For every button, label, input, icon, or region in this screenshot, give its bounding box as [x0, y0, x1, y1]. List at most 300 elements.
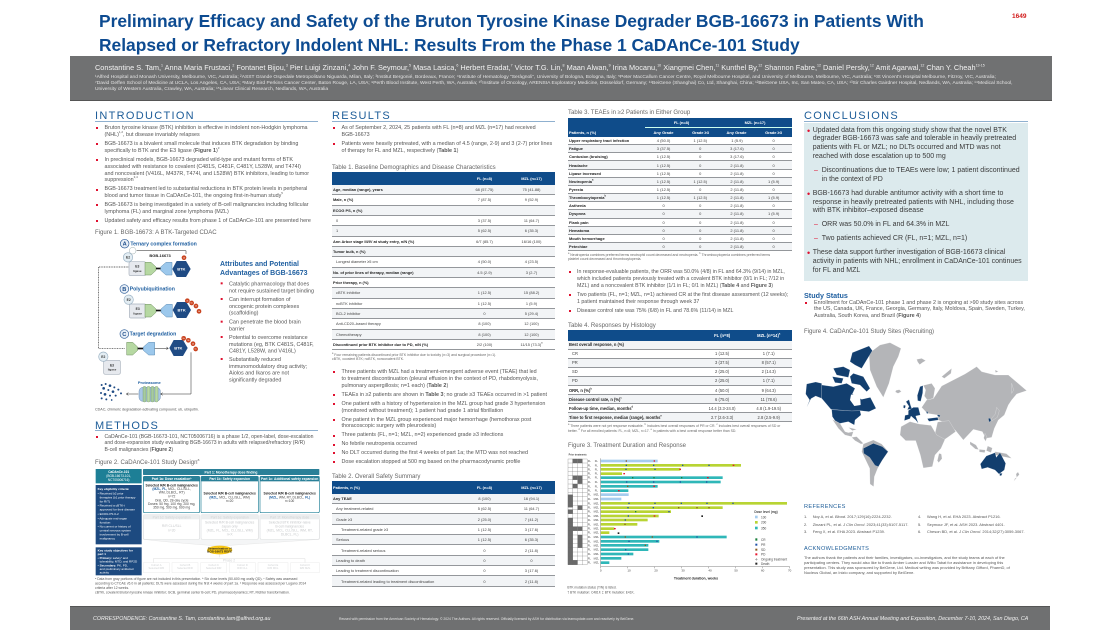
table 3: 0 [773, 154, 775, 159]
table 3: 1 (12.5) [693, 195, 707, 200]
histology and mutation labels: FL [588, 518, 591, 522]
table 1: 4 (23.5) [525, 259, 538, 264]
table 3: 0 [662, 211, 665, 216]
table 4: Time to first response, median (range), monthse [569, 414, 662, 420]
table 4: 9 (64.3) [762, 388, 776, 393]
table 1: 7 (87.5) [478, 197, 491, 202]
table 3: Fatigue [569, 146, 583, 151]
non-participating countries [832, 343, 1027, 487]
heading: conclusions: CONCLUSIONS [804, 110, 899, 122]
faded dose panels: Selected R/R B-cell malignancies [205, 520, 255, 524]
table 3: 2 (11.8) [730, 163, 744, 168]
table 2: 6 (35.3) [525, 537, 538, 542]
panel B [120, 285, 201, 318]
table 1: 15 (88.2) [524, 290, 539, 295]
table 2: Any treatment-related [336, 506, 373, 511]
phase 2 faded cohorts: R/R MCL [268, 566, 279, 570]
authors and affiliations band: ¹Alfred Hospital and Monash University, Melbourne, VIC, Australia; ²ASST Grande Ospedale Metropolitano Niguarda, Milan, Italy; ³Institut Bergonié, Bordeaux, France; ⁴Institute of Hematology “Seràgnoli”, University of Bologna, Bologna, Italy; ⁵Peter MacCallum Cancer Centre, Royal Melbourne Hospital, and University of Melbourne, Melbourne, VIC, Australia; ⁶St Vincent’s Hospital Melbourne, Fitzroy, VIC, Australia; [95, 75, 996, 80]
part 1a panel: Doses: 50 mg, 100 mg, 200 mg, [148, 502, 195, 506]
table 1: Tumor bulk, n (%) [333, 249, 366, 254]
attributes and advantages list: Aiolos and Ikaros are not [229, 371, 289, 377]
table 3: Neutropeniaa [569, 179, 593, 184]
table 3: Mouth hemorrhage [569, 236, 605, 241]
table 3: 1 (5.9) [768, 195, 779, 200]
figure 3 footnote [567, 586, 635, 594]
panel B: B [122, 287, 126, 293]
table 4 footnote [568, 423, 780, 433]
authors and affiliations band: Constantine S. Tam,1 Anna Maria Frustaci,2 Fontanet Bijou,3 Pier Luigi Zinzani,4 John F. Seymour,5 Masa Lasica,6 Herbert Eradat,7 Victor T.G. Lin,8 Maan Alwan,9 Irina Mocanu,10 Xiangmei Chen,11 Kunthel By,12 Shannon Fabre,12 Daniel Persky,12 Amit Agarwal,12 Chan Y. Cheah13-15 [95, 62, 985, 72]
table 4: 14.4 (3.3-24.0) [709, 406, 736, 411]
histology and mutation labels [588, 459, 600, 565]
table 4 footnote: better. d For all enrolled patients: FL, n=8; MZL, n=17. e In patients with a best overall response better than SD. [568, 428, 736, 433]
histology and mutation labels: FL [588, 501, 591, 505]
faded dose panels: Selected BTK inhibitor-naive [269, 520, 311, 524]
histology and mutation labels: FL [588, 463, 591, 467]
table 1: No. of prior lines of therapy, median (range) [333, 270, 414, 275]
table 3: FL (n=8) [674, 120, 689, 125]
table 1: ncBTK inhibitor [336, 301, 362, 306]
table 1: 4.5 (2-9) [477, 270, 492, 275]
table 4: 2.7 (2.6-3.3) [711, 415, 733, 420]
phase 2 faded cohorts: Phase 2 [223, 559, 235, 563]
heading: references: REFERENCES [804, 504, 846, 510]
histology and mutation labels: FL [588, 459, 591, 463]
histology and mutation labels: FL [595, 484, 598, 488]
study status bullet [805, 300, 1025, 319]
figure 1 caption: CDAC, chimeric degradation-activating compound; ub, ubiquitin. [95, 407, 199, 411]
title: Relapsed or Refractory Indolent NHL: Results From the Phase 1 CaDAnCe-101 Study [99, 34, 800, 54]
figure 4: world map of study sites [806, 342, 1026, 486]
table 4: 2.8 (2.5-9.9) [758, 415, 780, 420]
table 1: Age, median (range), years [333, 187, 383, 192]
table 1: 0 [483, 311, 486, 316]
table 1: 11 (64.7) [524, 218, 539, 223]
references list: Wang H, et al. EHA 2023. Abstract P1216. [927, 514, 1001, 519]
legend: SD [761, 548, 766, 552]
table 3: 0 [699, 187, 701, 192]
table 1: Chemotherapy [336, 332, 362, 337]
objectives box: part 1 [98, 552, 106, 556]
determination ellipse [207, 546, 232, 554]
figure 4 title: Figure 4. CaDAnCe-101 Study Sites (Recruiting) [804, 329, 934, 335]
objectives box: and [122, 556, 128, 560]
table 3: 1 (12.5) [657, 187, 670, 192]
table 3: 2 (11.8) [730, 244, 744, 249]
table 2: 2 (25.0) [478, 517, 491, 522]
histology and mutation labels: FL [595, 467, 598, 471]
table 2: 3 (17.6) [525, 568, 538, 573]
faded dose panels: Part 1f: Monotherapy dose [270, 515, 309, 519]
figure 2 footnotes: cBTKi, covalent Bruton tyrosine kinase inhibitor; GCB, germinal center B-cell; PD, pharmacodynamics; RT, Richter transformation. [95, 590, 290, 594]
introduction bullets: BGB-16673 is a bivalent small molecule that induces BTK degradation by binding [104, 141, 298, 147]
table 1: cBTK inhibitor [336, 290, 360, 295]
table 2: 11 (64.7) [524, 506, 539, 511]
histology and mutation labels: MZL [594, 548, 600, 552]
attributes and advantages list: Potential to overcome resistance [229, 335, 308, 341]
x axis [600, 458, 792, 581]
legend: Dose level (mg) [754, 510, 778, 514]
table 2: 1 (12.5) [478, 537, 491, 542]
legend [754, 510, 787, 566]
table 3: Grade ≥3 [765, 130, 782, 135]
table 3: 3 (37.5) [657, 146, 670, 151]
histology and mutation labels: FL [588, 497, 591, 501]
histology and mutation labels: MZL [594, 556, 600, 560]
figure 1: BTK-targeted CDAC diagram [95, 239, 314, 412]
faded dose panels: Part 1d: Safety expansion [153, 515, 191, 519]
table 1: 1 [336, 228, 338, 233]
attributes and advantages list: oncogenic protein complexes [229, 304, 300, 310]
table 3: 0 [773, 146, 775, 151]
table 4: 11 (78.6) [761, 397, 777, 402]
methods bullet: CaDAnCe-101 (BGB-16673-101, NCT05006716) is a phase 1/2, open-label, dose-escalation [104, 434, 313, 440]
panel: conclusions: Updated data from this ongoing study show that the novel BTK [813, 127, 1007, 134]
table 2: 8 (100) [478, 496, 491, 501]
table 1: 16/16 (100) [522, 239, 541, 244]
histology and mutation labels: MZL [594, 543, 600, 547]
table 3 footnote: platelet count decreased and thrombocytopenia. [568, 257, 641, 261]
histology and mutation labels: FL [588, 539, 591, 543]
table 3: 0 [699, 146, 701, 151]
references list: Noy A, et al. Blood. 2017;129(16):2224-2232. [813, 514, 892, 519]
phase 2 faded cohorts: Cohort B [180, 563, 190, 567]
table 3: Any Grade [654, 130, 673, 135]
table 1: 6/7 (85.7) [476, 239, 493, 244]
table 3 title: Table 3. TEAEs in ≥2 Patients in Either Group [568, 110, 690, 116]
phase 2 faded cohorts: Cohort C [208, 563, 219, 567]
panel: conclusions: – [814, 235, 818, 242]
references list: Cheson BD, et al. J Clin Oncol. 2014;32(27):3059-3067. [927, 529, 1025, 534]
participating countries [806, 346, 1006, 476]
attributes and advantages list: not require sustained target binding [229, 288, 314, 294]
histology and mutation labels: FL [588, 514, 591, 518]
attributes and advantages list: significantly degraded [229, 377, 281, 383]
histology and mutation labels: MZL [594, 522, 600, 526]
table 2: 16 (94.1) [524, 496, 539, 501]
figure 3 footnote: BTK mutation status (T/N) is listed. [567, 586, 617, 590]
table 4: MZL (n=14)a [757, 333, 780, 338]
histology and mutation labels: FL [588, 484, 591, 488]
panel A: BGB-16673 [149, 253, 171, 258]
results bullets top [333, 125, 552, 154]
table 3: 1 (5.9) [731, 138, 743, 143]
part 1a panel: Selected R/R B-cell malignancies [145, 483, 198, 487]
table 2 [332, 481, 555, 587]
panel A: Ternary complex formation [130, 241, 197, 247]
histology and mutation labels: MZL [594, 552, 600, 556]
results bullets top: Patients were heavily pretreated, with a median of 4.5 (range, 2-9) and 3 (2-7) prior lines [342, 141, 552, 147]
references list: 5. [918, 522, 921, 527]
part 1a panel: WM, DLBCL, RT) [159, 491, 185, 495]
table 2: Serious [336, 537, 349, 542]
table 1: 3 (2-7) [526, 270, 537, 275]
footer band [70, 606, 1050, 630]
histology and mutation labels: FL [595, 480, 598, 484]
text: Prior treatments [569, 454, 587, 457]
panel C: Target degradation [130, 332, 176, 338]
legend: Death [761, 562, 770, 566]
table 3: 0 [699, 171, 701, 176]
table 1: 2/2 (100) [477, 342, 492, 347]
table 3: Contusion (bruising) [569, 154, 608, 159]
objectives box [96, 547, 142, 575]
eligibility box: • ECOG PS 0-2 [98, 512, 119, 516]
attributes and advantages list: Can penetrate the blood brain [229, 319, 301, 325]
figure 2 footnotes: according to CTCAE v5.0 in all patients; DLTs were assessed during the first 4 weeks of part 1a. ᵈ Response was assessed per Lugano 2014 [95, 582, 306, 586]
table 3: 4 (50.0) [657, 138, 670, 143]
table 3: 0 [773, 203, 775, 208]
table 3: Upper respiratory tract infection [569, 138, 629, 143]
response markers [625, 465, 734, 555]
part 1c panel: (MZL, WM, RT, DLBCL, FL) [269, 495, 310, 499]
table 2: Grade ≥3 [336, 517, 352, 522]
results bullets top: of therapy for FL and MZL, respectively (Table 1) [342, 148, 458, 154]
eligibility box: therapies (≥1 prior therapy [100, 496, 136, 500]
faded dose panels: B-cell malignancies [275, 524, 304, 528]
attributes and advantages list: mutations (eg, BTK C481S, C481F, [229, 342, 314, 348]
table 3: 1 (12.5) [657, 195, 670, 200]
degraded peptide fragments [100, 383, 122, 401]
results bullets column 3: MZL) and a noncovalent BTK inhibitor (1/1 in FL; 0/1 in MZL) (Table 4 and Figure 3) [577, 283, 773, 289]
part 1 header: Part 1: Monotherapy dose finding [205, 470, 257, 474]
phase 2 faded cohorts: Cohort F [300, 563, 311, 567]
table 1 footnote: cBTK, covalent BTK; ncBTK, noncovalent BTK. [332, 357, 404, 361]
histology and mutation labels: FL [588, 527, 591, 531]
table 3: 0 [662, 244, 665, 249]
panel: conclusions: – [814, 167, 818, 174]
phase 2 faded cohorts [143, 554, 319, 573]
phase 2 faded cohorts: R/R MZL [300, 566, 311, 570]
introduction bullets: associated with resistance to covalent (C481S, C481F, C481Y, L528W, and T474I) [104, 164, 301, 170]
table 3: 0 [773, 220, 775, 225]
table 4: PR [572, 360, 578, 365]
table 3: 0 [773, 236, 775, 241]
faded dose panels: n=20 [168, 528, 176, 532]
results bullets column 3: Two patients (FL, n=1; MZL, n=1) achieved CR at the first disease assessment (12 weeks); [577, 292, 788, 298]
table 2 title: Table 2. Overall Safety Summary [332, 474, 420, 480]
histology and mutation labels: MZL [594, 497, 600, 501]
eligibility box: • Received a cBTK-i [98, 504, 125, 508]
table 3: 0 [773, 163, 775, 168]
attributes and advantages list: C481Y, L528W, and V416L) [229, 349, 296, 355]
figure 1 title: Figure 1. BGB-16673: A BTK-Targeted CDAC [95, 230, 217, 236]
histology and mutation labels: FL [588, 489, 591, 493]
introduction bullets: In preclinical models, BGB-16673 degraded wild-type and mutant forms of BTK [104, 157, 293, 163]
attributes and advantages list: Can interrupt formation of [229, 297, 291, 303]
table 3 footnote [568, 252, 770, 261]
x axis: Treatment duration, weeks [674, 577, 718, 581]
part 1b panel: n≈20 [226, 499, 233, 503]
phase 2 faded cohorts: Selected R/R [206, 566, 222, 570]
table 3: Petechiae [569, 244, 587, 249]
table 2: 0 [483, 548, 486, 553]
acknowledgments text: Nucleus Global, an Inizio company, and supported by BeiGene. [804, 570, 914, 575]
faded dose panels: R/R CLL/SLL [162, 524, 182, 528]
table 1: FL (n=8) [477, 176, 492, 181]
table 3: 0 [662, 203, 665, 208]
histology and mutation labels: FL [588, 556, 591, 560]
table 1: 1 (12.5) [478, 301, 491, 306]
attributes and advantages list: Catalytic pharmacology that does [229, 281, 309, 287]
table 1: 5 (62.5) [478, 228, 491, 233]
table 4 [568, 330, 792, 422]
table 2: Leading to treatment discontinuation [336, 568, 399, 573]
part 1a panel [143, 476, 200, 513]
table 1 footnote [332, 352, 496, 361]
objectives box: c [121, 557, 122, 559]
histology and mutation labels: FL [588, 510, 591, 514]
table 1: Male, n (%) [333, 197, 353, 202]
histology and mutation labels: MZL [594, 518, 600, 522]
table 4: PD [572, 378, 578, 383]
eligibility box: Key eligibility criteria: [98, 487, 129, 491]
proteasome: Proteasome [138, 380, 162, 385]
study id box: NCT05006716) [108, 478, 129, 482]
x axis: 20 [654, 569, 658, 573]
panel: conclusions: BGB-16673 had durable antitumor activity with a short time to [813, 190, 1003, 197]
table 3: Thrombocytopeniab [569, 195, 606, 200]
panel C [99, 330, 198, 395]
table 2: Patients, n (%) [333, 485, 360, 490]
table 3 [568, 118, 792, 251]
histology and mutation labels: FL [595, 489, 598, 493]
heading: introduction: INTRODUCTION [95, 110, 195, 122]
study status bullet: Australia, South Korea, and Brazil (Figure 4) [814, 313, 921, 319]
references list: 1. [804, 514, 807, 519]
footer band: Reused with permission from the American Society of Hematology. © 2024 The Authors. All rights reserved. Officially licensed by ASH for distribution via learnupdate.com and reactively by BeiGene. [339, 617, 634, 621]
histology and mutation labels: FL [588, 561, 591, 565]
x axis: 60 [761, 569, 765, 573]
table 1: Prior therapy, n (%) [333, 280, 369, 285]
figure 3 title: Figure 3. Treatment Duration and Response [568, 443, 686, 449]
table 3: 0 [699, 154, 701, 159]
study id box [96, 469, 142, 483]
table 3: 3 (17.6) [730, 154, 744, 159]
death markers [618, 515, 703, 534]
table 2: FL (n=8) [477, 485, 492, 490]
phase 2 faded cohorts: Cohort D [237, 563, 248, 567]
table 3: Patients, n (%) [569, 130, 596, 135]
results bullets top: BGB-16673 [342, 132, 370, 138]
title [99, 11, 924, 54]
part 1c panel: n≈100 [285, 499, 294, 503]
attributes and advantages list: Advantages of BGB-16673 [220, 270, 308, 277]
table 4: 3 (37.5) [715, 360, 729, 365]
table 4 title: Table 4. Responses by Histology [568, 322, 656, 328]
references list [804, 514, 1025, 534]
histology and mutation labels: FL [588, 493, 591, 497]
phase 2 faded cohorts: Cohort E [268, 563, 278, 567]
histology and mutation labels: FL [588, 480, 591, 484]
histology and mutation labels: FL [588, 522, 591, 526]
part 1 header [143, 469, 319, 475]
histology and mutation labels: FL [588, 531, 591, 535]
table 4: 2 (14.3) [762, 369, 776, 374]
figure 2 footnotes: ᵃ Data from gray portions of figure are not included in this presentation. ᵇ Six dose levels (50-600 mg orally QD). ᶜ Safety was assessed [95, 577, 297, 581]
table 2: MZL (n=17) [521, 485, 542, 490]
part 1c panel: Part 1c: Additional safety expansion [261, 477, 318, 481]
table 3: 0 [699, 244, 701, 249]
results bullets middle [333, 369, 547, 465]
study id box: CaDAnCe-101 [108, 470, 129, 474]
results bullets middle: One patient with a history of hypertension in the MZL group had grade 3 hypertension [342, 401, 545, 407]
x axis: 50 [734, 569, 738, 573]
results bullets middle: to treatment discontinuation (pleural effusion in the context of PD, rhabdomyolysis, [342, 376, 538, 382]
panel: conclusions: – [814, 221, 818, 228]
table 1 [332, 172, 555, 350]
eligibility box: • No current or history of [98, 525, 131, 529]
results bullets middle: Dose escalation stopped at 500 mg based on the pharmacodynamic profile [342, 459, 520, 465]
x axis: 0 [600, 569, 602, 573]
histology and mutation labels: MZL [594, 493, 600, 497]
faded dose panels: Japan only [222, 524, 238, 528]
attributes and advantages list: (scaffolding) [229, 311, 259, 317]
objectives box: Key study objectives for [98, 548, 134, 552]
table 3: 0 [699, 163, 701, 168]
panel: conclusions: reached with dose escalation up to 500 mg [813, 153, 946, 160]
histology and mutation labels: MZL [594, 510, 600, 514]
acknowledgments text: The authors thank the patients and their families, investigators, co-investigators, and the study teams at each of the [804, 554, 1005, 560]
table 1: 1 (5.9) [526, 301, 537, 306]
references list: Seymour JF, et al. ASH 2023. Abstract 4401. [927, 522, 1005, 527]
eligibility box: central nervous system [100, 529, 131, 533]
phase 2 faded cohorts: R/R CLL [237, 566, 248, 570]
part 1a panel: n=72 [168, 494, 176, 498]
table 3: 2 (11.8) [730, 228, 744, 233]
attributes and advantages list: barrier [229, 326, 245, 332]
table 3: 3 (17.6) [730, 146, 744, 151]
heading: acknowledgments: ACKNOWLEDGMENTS [804, 546, 869, 552]
table 1: 1 (12.5) [478, 290, 491, 295]
x axis: 70 [788, 569, 792, 573]
table 1: 12 (100) [524, 321, 539, 326]
introduction bullets: (NHL)1,2, but disease invariably relapses [104, 130, 200, 138]
study status heading: Study Status [804, 290, 848, 300]
table 1: Discontinued prior BTK inhibitor due to PD, n/N (%) [333, 342, 428, 347]
x axis: 30 [681, 569, 685, 573]
heading: results: RESULTS [332, 110, 391, 122]
references list: Zinzani PL, et al. J Clin Oncol. 2023;41(33):5107-5117. [813, 522, 908, 527]
table 1: 4 (50.0) [478, 259, 491, 264]
table 3: 0 [773, 171, 775, 176]
references list: 4. [918, 514, 921, 519]
histology and mutation labels: MZL [594, 514, 600, 518]
panel: conclusions: • [807, 248, 810, 258]
table 1 footnote: a Four remaining patients discontinued prior BTK inhibitor due to toxicity (n=3) and surgical procedure (n=1). [332, 352, 496, 357]
panel C: C [122, 332, 126, 338]
table 3: 0 [773, 244, 775, 249]
authors and affiliations band: ⁷David Geffen School of Medicine at UCLA, Los Angeles, CA, USA; ⁸Mary Bird Perkins Cancer Center, Baton Rouge, LA, USA; ⁹Perth Blood Institute, West Perth, WA, Australia; ¹⁰Institute of Oncology, ARENSIA Exploratory Medicine, Düsseldorf, Germany; ¹¹BeiGene (Shanghai) Co, Ltd, Shanghai, China; ¹²BeiGene USA, Inc, San Mateo, CA, USA; ¹³Sir Charles Gairdner Hospital, Nedlands, WA, Australia; ¹⁴Medical School, [95, 81, 1013, 86]
legend: 350 [761, 526, 767, 530]
panel: conclusions: degrader BGB-16673 was safe and tolerable in heavily pretreated [813, 135, 1016, 142]
part 1c panel [260, 476, 319, 513]
table 3: Headache [569, 163, 588, 168]
table 1: MZL (n=17) [521, 176, 542, 181]
table 1: 12 (100) [524, 332, 539, 337]
table 3: 0 [699, 211, 701, 216]
table 3: 1 (12.5) [657, 179, 670, 184]
histology and mutation labels: MZL [594, 506, 600, 510]
table 1: 11/15 (73.3)a [520, 342, 543, 347]
table 1: 5 (29.4) [525, 311, 538, 316]
table 4: CR [572, 351, 578, 356]
phase 2 faded cohorts: Cohort A [151, 563, 162, 567]
eligibility box: • Received ≥2 prior [98, 492, 123, 496]
table 3: 2 (11.8) [730, 203, 744, 208]
table 1 title: Table 1. Baseline Demographics and Disease Characteristics [332, 164, 496, 170]
objectives box: • Primary: safety [98, 556, 121, 560]
results bullets middle: Three patients (FL, n=1; MZL, n=2) experienced grade ≥3 infections [342, 432, 503, 438]
